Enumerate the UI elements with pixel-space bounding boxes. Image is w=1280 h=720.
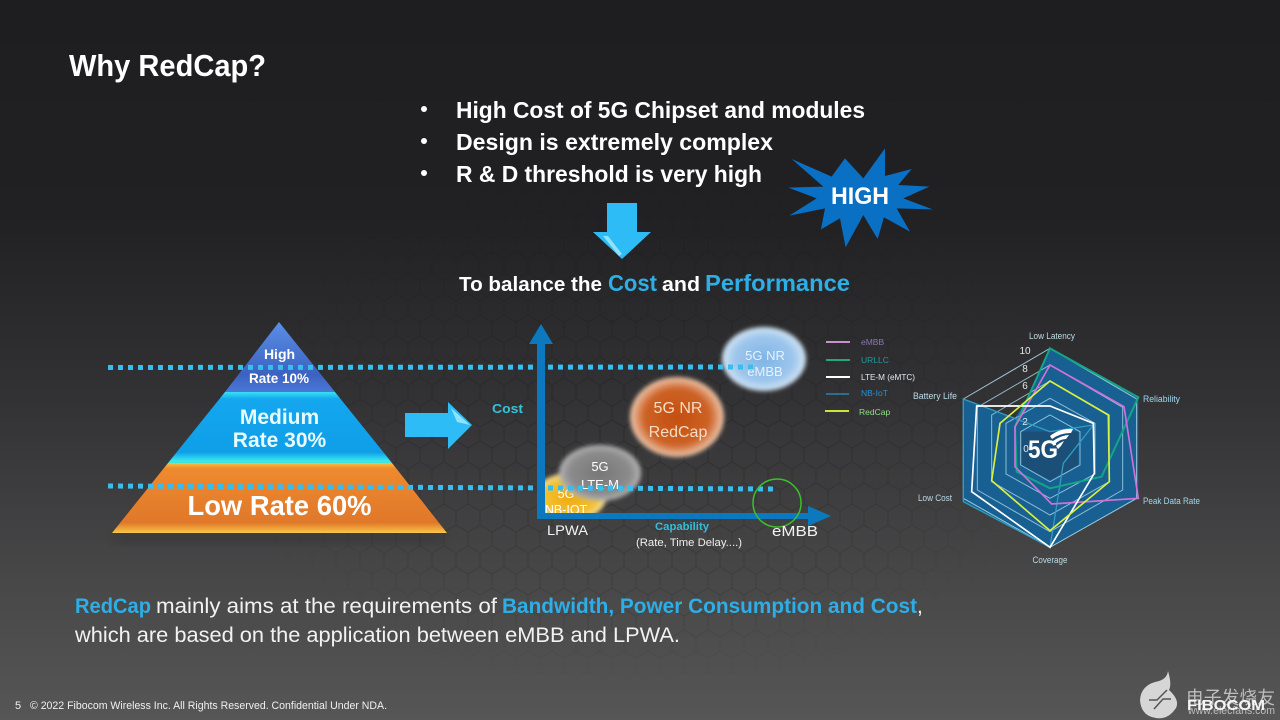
bubble: 5G NR RedCap: RedCap bbox=[649, 424, 707, 441]
pyramid tier: medium rate: Medium bbox=[240, 406, 319, 429]
radar scale numbers: 8 bbox=[1022, 364, 1028, 375]
title: Why RedCap? bbox=[69, 48, 266, 83]
legend: radar series: eMBB bbox=[861, 337, 884, 347]
bullet list: reasons for high cost: Design is extremely complex bbox=[456, 129, 773, 155]
summary text: RedCap bbox=[75, 595, 151, 618]
radar axis labels: Low Cost bbox=[918, 493, 952, 503]
bubble: 5G NR eMBB bbox=[722, 327, 806, 391]
radar axis labels: Reliability bbox=[1143, 394, 1180, 404]
pyramid tier: high rate: High bbox=[264, 346, 295, 362]
radar axis labels: Low Latency bbox=[1029, 331, 1075, 341]
chart axes bbox=[529, 324, 831, 526]
pyramid tier: low rate bbox=[112, 463, 447, 533]
bubble: 5G LTE-M: 5G bbox=[591, 459, 609, 474]
bullet list: reasons for high cost: R & D threshold is very high bbox=[456, 161, 762, 187]
bubble: 5G NB-IoT bbox=[545, 471, 608, 513]
watermark logo: www.elecfans.com bbox=[1187, 705, 1275, 717]
icon: 5G logo: 5G bbox=[1028, 436, 1058, 464]
footer: page number and copyright: 5 bbox=[15, 700, 21, 712]
highlight circle: eMBB bbox=[753, 479, 801, 527]
axis label: eMBB: eMBB bbox=[772, 523, 818, 540]
summary text: , bbox=[917, 595, 923, 618]
bullet list: reasons for high cost: High Cost of 5G Chipset and modules bbox=[456, 97, 865, 123]
balance statement: Performance bbox=[705, 270, 850, 296]
axis label: LPWA: LPWA bbox=[547, 522, 589, 538]
radar scale numbers: 6 bbox=[1022, 381, 1028, 392]
icon: 5G logo bbox=[1028, 429, 1073, 464]
balance statement: and bbox=[662, 274, 700, 296]
summary text: Bandwidth, Power Consumption and Cost bbox=[502, 595, 917, 618]
legend: radar series bbox=[825, 337, 915, 417]
axis label: Capability: Capability bbox=[655, 521, 710, 533]
axis label: Cost: Cost bbox=[492, 401, 524, 416]
balance statement: To balance the bbox=[459, 274, 602, 296]
balance statement: Cost bbox=[608, 270, 657, 296]
watermark logo bbox=[1140, 671, 1275, 718]
pyramid tier: high rate: Rate 10% bbox=[249, 371, 309, 386]
summary text: mainly aims at the requirements of bbox=[156, 595, 497, 618]
radar chart: 5G capabilities bbox=[913, 331, 1200, 565]
legend: radar series: NB-IoT bbox=[861, 388, 888, 398]
balance statement bbox=[459, 270, 850, 296]
bubble: 5G NR eMBB: 5G NR bbox=[745, 348, 785, 363]
arrow: down to balance statement bbox=[593, 203, 651, 259]
legend: radar series: RedCap bbox=[859, 407, 890, 417]
legend: radar series: URLLC bbox=[861, 355, 889, 365]
bubble: 5G NB-IoT: 5G bbox=[558, 487, 574, 501]
summary text: which are based on the application between eMBB and LPWA. bbox=[74, 624, 680, 647]
pyramid tier: medium rate bbox=[168, 392, 392, 463]
pyramid chart: rate share bbox=[112, 322, 447, 541]
bubble: 5G LTE-M bbox=[559, 445, 641, 501]
radar scale numbers: 0 bbox=[1023, 444, 1029, 455]
radar scale numbers: 10 bbox=[1019, 346, 1031, 357]
legend: radar series: LTE-M (eMTC) bbox=[861, 372, 915, 382]
bubble: 5G NR RedCap bbox=[630, 377, 724, 457]
pyramid tier: low rate: Low Rate 60% bbox=[188, 490, 372, 521]
radar scale numbers: 2 bbox=[1022, 417, 1028, 428]
bubble: 5G NR eMBB: eMBB bbox=[747, 364, 783, 379]
icon: HIGH starburst: HIGH bbox=[831, 183, 889, 210]
radar axis labels: Battery Life bbox=[913, 391, 957, 401]
radar scale numbers bbox=[1019, 346, 1031, 455]
pyramid tier: high rate bbox=[225, 322, 335, 392]
footer: page number and copyright: © 2022 Fibocom Wireless Inc. All Rights Reserved. Confidential Under NDA. bbox=[30, 700, 387, 712]
chart: cost vs capability bbox=[108, 324, 831, 549]
dotted line: high-cost threshold bbox=[108, 364, 755, 370]
watermark logo: FIBOCOM bbox=[1187, 697, 1265, 714]
radar axis labels: Coverage bbox=[1032, 555, 1068, 565]
radar axis labels bbox=[913, 331, 1200, 565]
arrow: pyramid to cost chart bbox=[405, 402, 472, 449]
bubble: 5G NB-IoT: NB-IOT bbox=[545, 503, 588, 517]
summary text bbox=[74, 595, 923, 647]
radar axis labels: Peak Data Rate bbox=[1143, 496, 1200, 506]
icon: HIGH starburst bbox=[788, 148, 933, 247]
pyramid tier: medium rate: Rate 30% bbox=[233, 429, 327, 452]
watermark logo: 电子发烧友 bbox=[1186, 688, 1275, 708]
axis label: rate and time delay: (Rate, Time Delay....) bbox=[636, 537, 742, 549]
bubble: 5G NR RedCap: 5G NR bbox=[654, 400, 702, 417]
dotted line: low-cost threshold bbox=[108, 486, 773, 489]
bubble: 5G LTE-M: LTE-M bbox=[581, 477, 619, 492]
bullet list: reasons for high cost bbox=[421, 97, 865, 187]
